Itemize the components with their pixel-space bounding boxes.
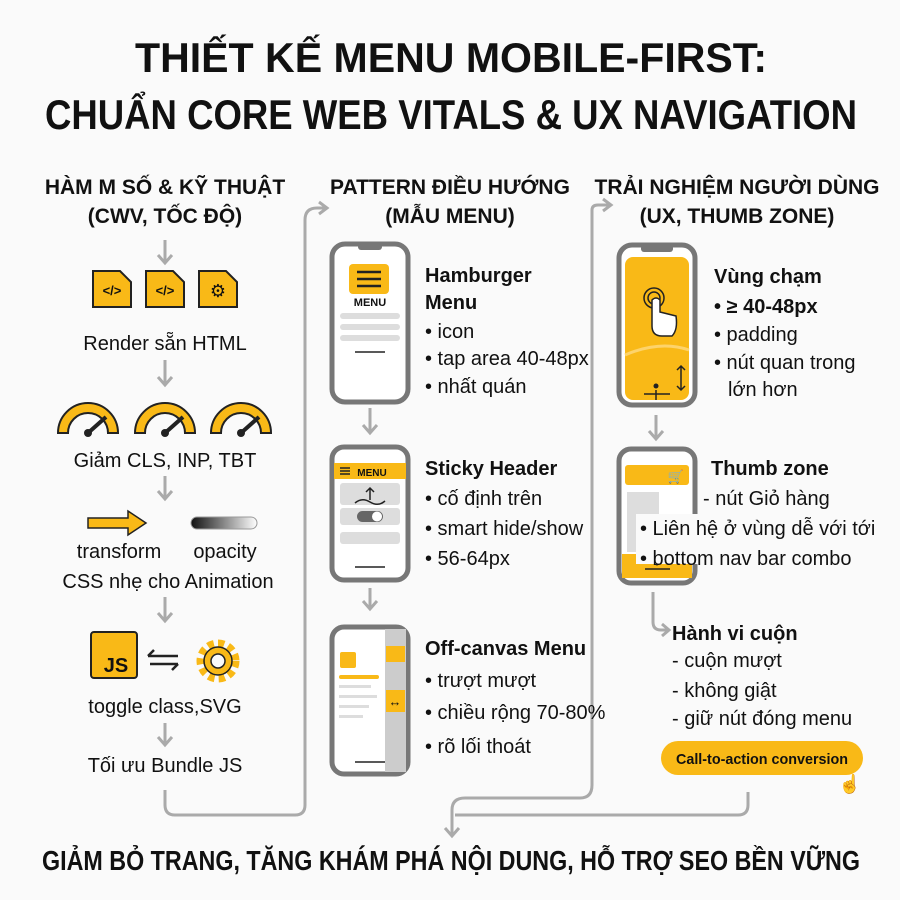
- text: bundle: Tối ưu Bundle JS: [88, 755, 242, 777]
- text: scroll behavior: Hành vi cuộn: [672, 623, 798, 645]
- CTA button: [661, 741, 863, 795]
- column 2 heading: PATTERN ĐIỀU HƯỚNG: [330, 175, 570, 199]
- icon: code files: ⚙: [210, 281, 226, 301]
- phone: sticky header: [332, 447, 408, 580]
- text: transform opacity: opacity: [193, 541, 257, 563]
- CTA button: Call-to-action conversion: [676, 751, 848, 768]
- column 3 heading: (UX, THUMB ZONE): [640, 205, 834, 228]
- column 3 heading: [594, 175, 880, 228]
- phone: sticky header: MENU: [357, 468, 387, 479]
- text: hamburger: [425, 265, 589, 398]
- icon: code files: </>: [103, 283, 122, 298]
- arrow: [649, 415, 663, 439]
- arrow bent: [653, 592, 669, 636]
- text: sticky: • 56-64px: [425, 548, 510, 570]
- text: giam: Giảm CLS, INP, TBT: [74, 450, 256, 472]
- icon: code files: </>: [156, 283, 175, 298]
- text: thumb zone: • bottom nav bar combo: [640, 548, 852, 570]
- text: transform opacity: CSS nhẹ cho Animation: [62, 571, 274, 593]
- text: touch area: • nút quan trong: [714, 352, 856, 374]
- column 1 heading: (CWV, TỐC ĐỘ): [88, 204, 242, 228]
- column 1 heading: [45, 175, 285, 228]
- text: hamburger: • tap area 40-48px: [425, 348, 589, 370]
- title: THIẾT KẾ MENU MOBILE-FIRST:: [135, 34, 767, 81]
- text: render: Render sẵn HTML: [83, 332, 247, 355]
- text: transform opacity: [62, 541, 274, 593]
- text: transform opacity: transform: [77, 541, 161, 563]
- text: scroll behavior: - không giật: [672, 680, 777, 702]
- text: thumb zone: • Liên hệ ở vùng dễ với tới: [640, 517, 875, 540]
- text: hamburger: Hamburger: [425, 265, 532, 287]
- column 1 arrows: [158, 240, 172, 745]
- text: hamburger: Menu: [425, 292, 477, 314]
- text: off-canvas: • chiều rộng 70-80%: [425, 702, 606, 724]
- text: touch area: lớn hơn: [728, 379, 798, 401]
- arrow: [363, 408, 377, 433]
- text: touch area: Vùng chạm: [714, 266, 822, 288]
- icon: JS gear: [91, 632, 235, 678]
- text: scroll behavior: [672, 623, 852, 730]
- text: sticky: Sticky Header: [425, 458, 558, 480]
- title: [45, 34, 857, 138]
- text: thumb zone: [636, 458, 875, 570]
- column 2 heading: [330, 175, 570, 228]
- text: touch area: [714, 266, 856, 401]
- text: thumb zone: - nút Giỏ hàng: [703, 488, 830, 510]
- text: touch area: • ≥ 40-48px: [714, 296, 818, 318]
- text: scroll behavior: - cuộn mượt: [672, 650, 782, 672]
- text: toggle: toggle class,SVG: [88, 696, 242, 718]
- phone: hamburger: MENU: [354, 297, 386, 309]
- text: scroll behavior: - giữ nút đóng menu: [672, 708, 852, 730]
- icon: code files: [93, 271, 237, 307]
- text: off-canvas: [425, 638, 606, 758]
- phone: thumb zone: 🛒: [668, 469, 684, 484]
- text: sticky: • smart hide/show: [425, 518, 584, 540]
- phone: touch area: [619, 245, 695, 405]
- text: off-canvas: Off-canvas Menu: [425, 638, 586, 660]
- text: sticky: • cố định trên: [425, 488, 542, 510]
- phone: hamburger: [332, 244, 408, 402]
- icon: JS gear: JS: [104, 655, 128, 677]
- column 1 heading: HÀM M SỐ & KỸ THUẬT: [45, 175, 285, 199]
- icon: gauges: [58, 403, 271, 437]
- icon: transform arrow and opacity gradient: [88, 511, 257, 535]
- connectors: [165, 199, 748, 836]
- text: touch area: • padding: [714, 324, 798, 346]
- text: off-canvas: • trượt mượt: [425, 670, 537, 692]
- text: off-canvas: • rõ lối thoát: [425, 736, 531, 758]
- CTA button: ☝: [839, 773, 861, 795]
- text: hamburger: • icon: [425, 321, 474, 343]
- phone: thumb zone: [619, 449, 695, 583]
- text: thumb zone: Thumb zone: [711, 458, 829, 480]
- arrow: [363, 588, 377, 609]
- phone: off-canvas: ↔: [388, 694, 402, 709]
- text: hamburger: • nhất quán: [425, 376, 527, 398]
- column 3 heading: TRẢI NGHIỆM NGƯỜI DÙNG: [594, 175, 880, 199]
- phone: off-canvas: [332, 627, 408, 774]
- column 2 heading: (MẪU MENU): [385, 205, 515, 228]
- text: sticky: [425, 458, 584, 570]
